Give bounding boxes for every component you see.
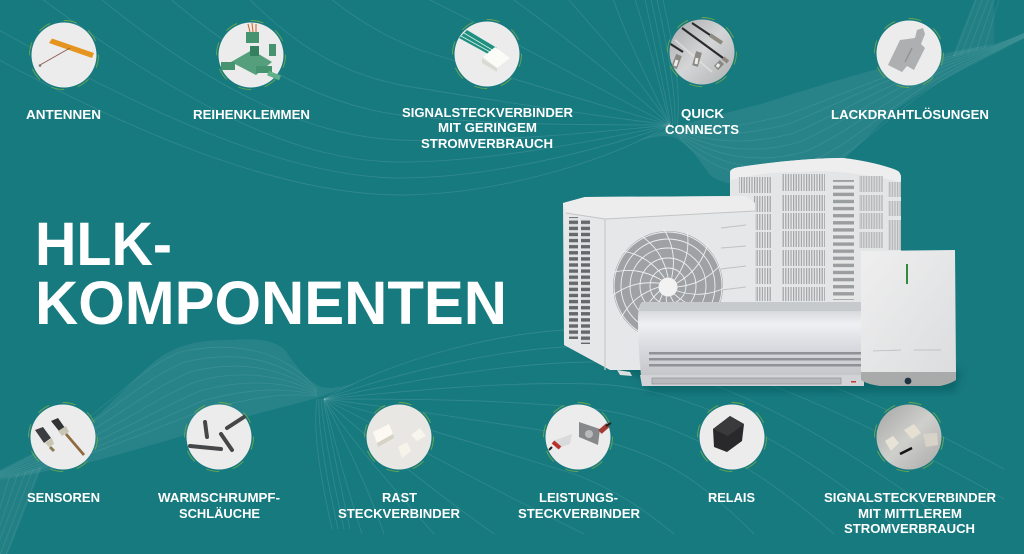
label: Signalsteckverbinder mit mittlerem Stromverbrauch: [824, 490, 997, 536]
label: Quick Connects: QUICK: [681, 106, 725, 121]
label: Signalsteckverbinder mit mittlerem Stromverbrauch: STROMVERBRAUCH: [844, 521, 975, 536]
label: Rast Steckverbinder: [338, 490, 461, 521]
badge: latching connectors: [364, 402, 434, 472]
label: Quick Connects: CONNECTS: [665, 122, 739, 137]
label: Rast Steckverbinder: RAST: [382, 490, 417, 505]
item: Rast Steckverbinder: [338, 402, 461, 521]
title: [35, 210, 507, 337]
badge: heat shrink tubes: [184, 402, 254, 472]
badge: medium power connectors: [874, 402, 944, 472]
badge: antenna: [30, 20, 98, 90]
label: Lackdrahtlösungen: LACKDRAHTLÖSUNGEN: [831, 107, 989, 122]
item: Relais: [698, 402, 766, 505]
label: Relais: RELAIS: [708, 490, 755, 505]
wall control panel: [861, 250, 956, 386]
label: Signalsteckverbinder mit geringem Stromverbrauch: STROMVERBRAUCH: [421, 136, 553, 151]
label: Signalsteckverbinder mit geringem Stromverbrauch: SIGNALSTECKVERBINDER: [402, 105, 574, 120]
label: Leistungssteckverbinder: [518, 490, 641, 521]
label: Antennen: ANTENNEN: [26, 107, 101, 122]
label: Signalsteckverbinder mit mittlerem Stromverbrauch: SIGNALSTECKVERBINDER: [824, 490, 997, 505]
label: Warmschrumpfschläuche: WARMSCHRUMPF-: [158, 490, 280, 505]
label: Warmschrumpfschläuche: [158, 490, 280, 521]
shadow: [575, 350, 962, 392]
item: Signalsteckverbinder geringem Stromverbrauch: [402, 20, 574, 151]
label: Leistungssteckverbinder: LEISTUNGS-: [539, 490, 618, 505]
label: Signalsteckverbinder mit mittlerem Stromverbrauch: MIT MITTLEREM: [858, 506, 962, 521]
item: Sensoren: [27, 402, 100, 505]
item: Signalsteckverbinder mittlerem Stromverbrauch: [824, 402, 997, 536]
badge: sensors: [28, 402, 98, 472]
HVAC units illustration: [563, 158, 962, 392]
title: HLK-: [35, 210, 172, 278]
label: Signalsteckverbinder mit geringem Stromverbrauch: MIT GERINGEM: [438, 120, 537, 135]
badge: quick connect terminals: [668, 18, 736, 86]
fan grille: [611, 228, 726, 344]
item: Reihenklemmen: [193, 20, 310, 122]
rear condenser unit: [730, 158, 901, 304]
badge: ribbon connector: [452, 20, 522, 88]
item: Leistungssteckverbinder: [518, 402, 641, 521]
item: Warmschrumpfschläuche: [158, 402, 280, 521]
label: Sensoren: SENSOREN: [27, 490, 100, 505]
badge: magnet wire terminal: [874, 18, 944, 88]
label: Rast Steckverbinder: STECKVERBINDER: [338, 506, 461, 521]
indoor wall unit: [638, 302, 864, 386]
label: Quick Connects: [665, 106, 739, 137]
label: Signalsteckverbinder mit geringem Stromverbrauch: [402, 105, 574, 151]
item: Antennen: [26, 20, 101, 122]
label: Leistungssteckverbinder: STECKVERBINDER: [518, 506, 641, 521]
label: Warmschrumpfschläuche: SCHLÄUCHE: [179, 506, 260, 521]
label: Reihenklemmen: REIHENKLEMMEN: [193, 107, 310, 122]
item: Quick Connects: [665, 18, 739, 137]
item: Lackdrahtlösungen: [831, 18, 989, 122]
title: KOMPONENTEN: [35, 269, 507, 337]
badge: power connectors: [544, 402, 612, 472]
outdoor split unit: [563, 196, 755, 376]
badge: relay: [698, 402, 766, 472]
badge: terminal block: [216, 20, 286, 90]
